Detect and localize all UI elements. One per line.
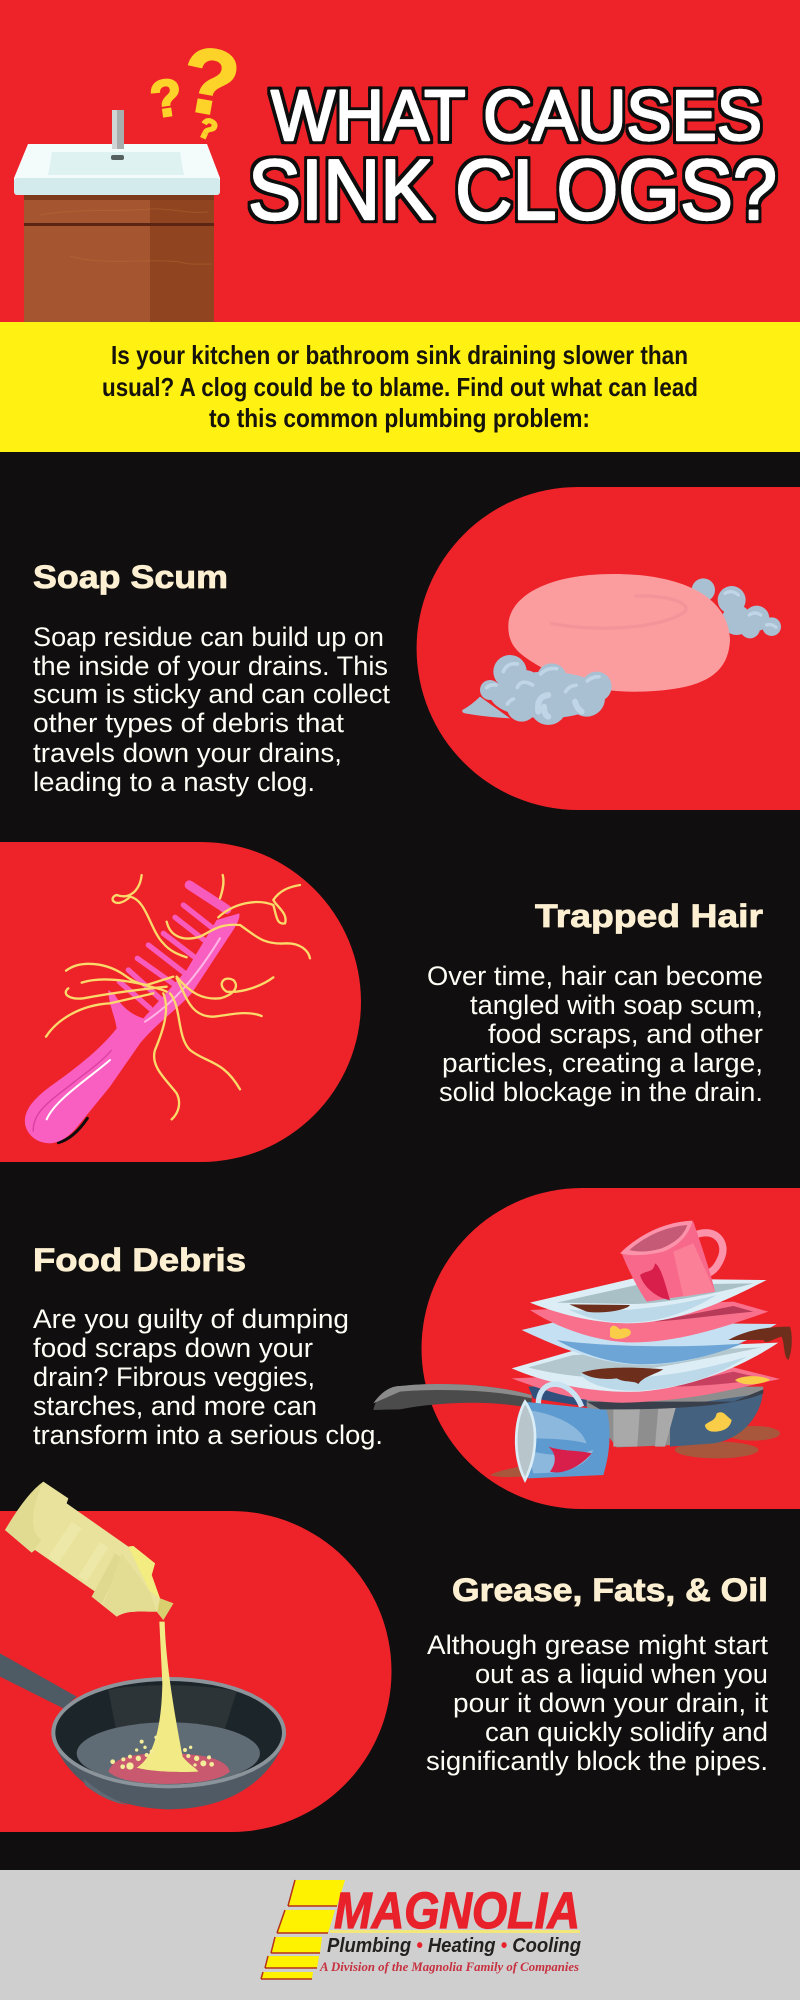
- text: grease body: pour it down your drain, it: [453, 1688, 769, 1718]
- text: food debris body: [33, 1304, 383, 1450]
- text: trapped hair body: [427, 961, 763, 1107]
- text: food debris body: starches, and more can: [33, 1391, 317, 1421]
- panel: trapped hair image: [0, 842, 361, 1162]
- logo: Magnolia: A Division of the Magnolia Family of Companies: [319, 1959, 579, 1974]
- heading: grease fats oil: Grease, Fats, & Oil: [452, 1572, 768, 1608]
- title: SINK CLOGS?: [248, 143, 777, 238]
- title: [248, 77, 777, 238]
- text: soap scum body: scum is sticky and can collect: [33, 679, 391, 709]
- text: soap scum body: Soap residue can build up on: [33, 622, 384, 652]
- title: WHAT CAUSES: [271, 77, 762, 156]
- heading: food debris: Food Debris: [33, 1242, 246, 1278]
- text: food debris body: transform into a serious clog.: [33, 1420, 383, 1450]
- intro text: Is your kitchen or bathroom sink draining slower than: [111, 340, 688, 370]
- text: trapped hair body: tangled with soap scum,: [470, 990, 763, 1020]
- logo: Magnolia: Plumbing • Heating • Cooling: [327, 1935, 581, 1957]
- text: food debris body: food scraps down your: [33, 1333, 313, 1363]
- text: soap scum body: travels down your drains,: [33, 738, 342, 768]
- icon: question marks: [147, 27, 247, 147]
- panel: dark background: [0, 452, 800, 1870]
- text: grease body: significantly block the pipes.: [426, 1746, 768, 1776]
- text: food debris body: drain? Fibrous veggies,: [33, 1362, 315, 1392]
- panel: intro: [0, 322, 800, 452]
- icon: question marks: ?: [193, 111, 222, 147]
- panel: food debris image: [373, 1188, 800, 1509]
- text: food debris body: Are you guilty of dumping: [33, 1304, 349, 1334]
- text: trapped hair body: food scraps, and other: [488, 1019, 763, 1049]
- panel: footer: [0, 1870, 800, 2000]
- icon: soap bar with foam: [462, 574, 781, 725]
- icon: oil bottle pouring into pan: [0, 1482, 286, 1809]
- icon: comb with hair: [25, 875, 310, 1143]
- intro text: to this common plumbing problem:: [209, 403, 590, 433]
- text: trapped hair body: Over time, hair can become: [427, 961, 763, 991]
- icon: dirty dishes: [373, 1221, 792, 1480]
- text: soap scum body: other types of debris that: [33, 708, 345, 738]
- intro text: usual? A clog could be to blame. Find out what can lead: [102, 372, 698, 402]
- icon: question marks: ?: [174, 27, 247, 137]
- text: trapped hair body: particles, creating a large,: [442, 1048, 763, 1078]
- text: grease body: can quickly solidify and: [485, 1717, 768, 1747]
- icon: logo stripes: [261, 1880, 345, 1979]
- panel: grease image: [0, 1482, 392, 1832]
- icon: bathroom sink: [14, 110, 220, 322]
- heading: trapped hair: Trapped Hair: [535, 898, 763, 934]
- panel: soap scum image: [417, 487, 800, 810]
- icon: question marks: ?: [147, 68, 186, 130]
- intro text: [102, 340, 698, 433]
- text: soap scum body: the inside of your drains. This: [33, 651, 388, 681]
- text: grease body: Although grease might start: [427, 1630, 769, 1660]
- heading: soap scum: Soap Scum: [33, 559, 228, 595]
- logo: Magnolia: [261, 1880, 581, 1979]
- panel: header: [0, 0, 800, 322]
- text: soap scum body: leading to a nasty clog.: [33, 767, 315, 797]
- text: grease body: out as a liquid when you: [475, 1659, 768, 1689]
- text: grease body: [426, 1630, 769, 1776]
- logo: Magnolia: MAGNOLIA: [334, 1882, 580, 1939]
- text: trapped hair body: solid blockage in the drain.: [439, 1077, 763, 1107]
- text: soap scum body: [33, 622, 391, 797]
